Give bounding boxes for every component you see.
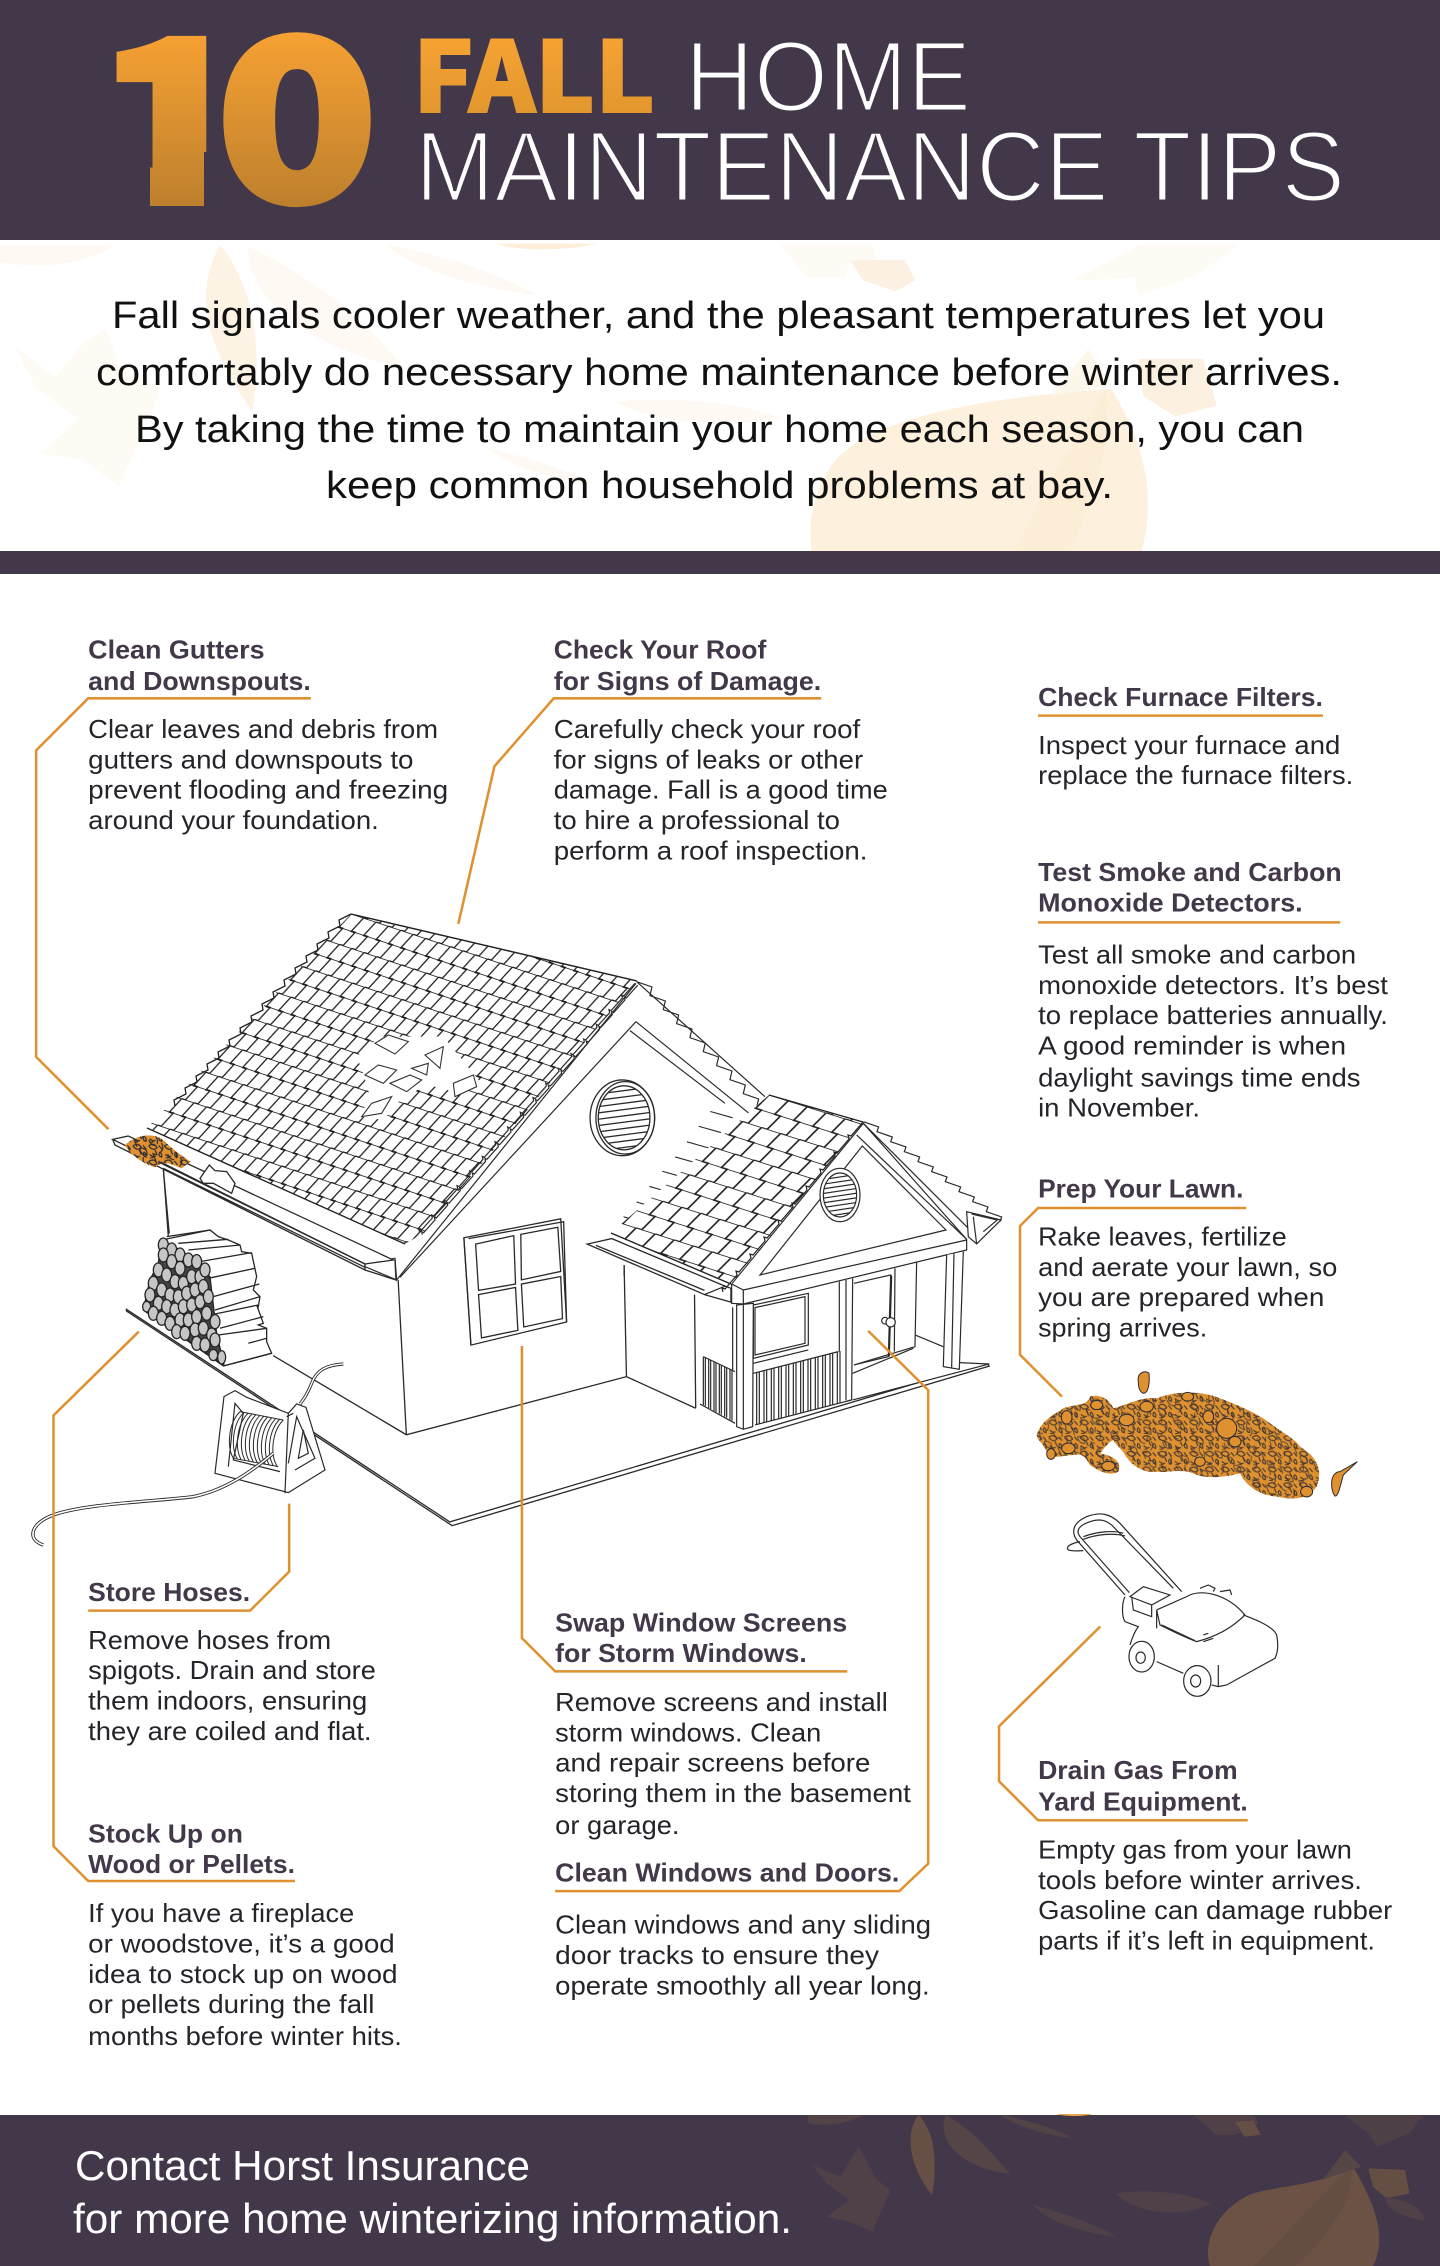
tip: clean gutters: gutters and downspouts to — [88, 746, 413, 774]
porch body — [700, 1250, 989, 1430]
tip: swap screens: storm windows. Clean — [555, 1719, 821, 1747]
background leaves: intro — [0, 244, 1240, 561]
tip: check roof: Carefully check your roof — [554, 716, 861, 744]
tip: swap screens: or garage. — [555, 1812, 680, 1840]
tip: store hoses: spigots. Drain and store — [88, 1657, 376, 1685]
tip: smoke detectors: in November. — [1038, 1095, 1200, 1123]
tip: check roof: damage. Fall is a good time — [554, 777, 888, 805]
tip: smoke detectors: A good reminder is when — [1038, 1033, 1346, 1061]
tips callouts — [36, 636, 1393, 2051]
roof damage — [357, 1035, 480, 1120]
tip: stock wood: months before winter hits. — [88, 2023, 402, 2051]
back wall — [854, 1262, 917, 1365]
tip: clean gutters: prevent flooding and freezing — [88, 777, 448, 805]
tip: check roof: to hire a professional to — [554, 807, 840, 835]
tip: stock wood: Stock Up on — [88, 1821, 243, 1849]
leaf pile illustration — [1037, 1372, 1357, 1499]
main gable, rake tiles — [365, 982, 765, 1280]
tip: smoke detectors — [1038, 859, 1388, 1123]
tip: swap screens: storing them in the basement — [555, 1780, 911, 1808]
tip: store hoses: Store Hoses. — [88, 1579, 250, 1607]
intro paragraph: keep common household problems at bay. — [326, 465, 1113, 507]
house illustration — [33, 914, 1002, 1545]
tip: store hoses — [88, 1504, 376, 1746]
tip: stock wood: Wood or Pellets. — [88, 1851, 295, 1879]
tip: clean gutters: Clean Gutters — [88, 636, 265, 664]
tip: drain gas: tools before winter arrives. — [1038, 1867, 1362, 1895]
tip: clean gutters — [36, 636, 448, 1129]
tip: check roof: Check Your Roof — [554, 636, 767, 664]
tip: prep lawn: and aerate your lawn, so — [1038, 1254, 1337, 1282]
tip: swap screens: and repair screens before — [555, 1750, 870, 1778]
ground slab and walls — [126, 1170, 989, 1526]
title word HOME: HOME — [685, 21, 971, 133]
intro paragraph — [96, 295, 1342, 507]
tip: check roof: for Signs of Damage. — [554, 668, 821, 696]
lawn mower illustration — [1067, 1514, 1278, 1696]
header banner — [0, 0, 1440, 269]
center column — [839, 1278, 853, 1402]
woodpile — [143, 1230, 272, 1366]
tip: swap screens: Swap Window Screens — [555, 1609, 847, 1637]
tip: stock wood — [53, 1332, 402, 2051]
tip: clean windows: operate smoothly all year long. — [555, 1972, 930, 2000]
title word FALL: FALL — [413, 0, 655, 140]
tip: furnace filters: Check Furnace Filters. — [1038, 684, 1323, 712]
tip: smoke detectors: Test Smoke and Carbon — [1038, 859, 1342, 887]
intro paragraph: By taking the time to maintain your home each season, you can — [135, 409, 1304, 451]
porch stub lines — [624, 1111, 733, 1223]
main roof tiles — [147, 914, 637, 1244]
left fence — [700, 1357, 735, 1423]
tip: furnace filters — [1038, 684, 1353, 790]
title number 10 — [94, 0, 378, 269]
title line MAINTENANCE TIPS: MAINTENANCE TIPS — [415, 111, 1345, 223]
tip: store hoses: they are coiled and flat. — [88, 1718, 372, 1746]
left post — [737, 1303, 753, 1429]
hose reel — [33, 1364, 343, 1545]
tip: swap screens: for Storm Windows. — [555, 1640, 807, 1668]
porch gutter — [587, 1239, 731, 1302]
intro paragraph: comfortably do necessary home maintenance before winter arrives. — [96, 352, 1342, 394]
divider band — [0, 551, 1440, 574]
tip: drain gas: Empty gas from your lawn — [1038, 1836, 1352, 1864]
tip: drain gas: Gasoline can damage rubber — [1038, 1897, 1393, 1925]
porch gutter end — [967, 1212, 1001, 1244]
tip: stock wood: If you have a fireplace — [88, 1900, 354, 1928]
window — [753, 1293, 808, 1363]
left gutter — [113, 1136, 396, 1280]
tip: clean gutters: around your foundation. — [88, 807, 379, 835]
tip: store hoses: Remove hoses from — [88, 1627, 331, 1655]
tip: clean windows: Clean Windows and Doors. — [555, 1860, 899, 1888]
tip: furnace filters: replace the furnace filters. — [1038, 762, 1353, 790]
tip: check roof — [458, 636, 888, 924]
tip: store hoses: them indoors, ensuring — [88, 1688, 367, 1716]
tip: prep lawn — [1020, 1176, 1337, 1397]
footer banner: for more home winterizing information. — [73, 2195, 792, 2242]
front window — [464, 1219, 567, 1345]
tip: drain gas: parts if it’s left in equipment. — [1038, 1928, 1375, 1956]
tip: stock wood: idea to stock up on wood — [88, 1961, 398, 1989]
tip: smoke detectors: monoxide detectors. It’s best — [1038, 972, 1388, 1000]
tip: stock wood: or pellets during the fall — [88, 1991, 374, 2019]
tip: clean gutters: Clear leaves and debris from — [88, 716, 438, 744]
tip: check roof: perform a roof inspection. — [554, 837, 867, 865]
footer text: Contact Horst Insurance — [75, 2142, 530, 2189]
tip: check roof: for signs of leaks or other — [554, 746, 864, 774]
tip: furnace filters: Inspect your furnace and — [1038, 732, 1340, 760]
door — [854, 1275, 892, 1365]
footer leaves — [808, 2114, 1424, 2266]
porch — [700, 1122, 1002, 1430]
tip: drain gas: Yard Equipment. — [1038, 1789, 1248, 1817]
tip: smoke detectors: to replace batteries annually. — [1038, 1002, 1388, 1030]
tip: drain gas: Drain Gas From — [1038, 1757, 1238, 1785]
porch roof tiles — [611, 1095, 863, 1292]
tip: smoke detectors: Test all smoke and carbon — [1038, 941, 1356, 969]
round attic vent — [590, 1080, 658, 1156]
tip: prep lawn: Rake leaves, fertilize — [1038, 1223, 1287, 1251]
right fence — [753, 1352, 852, 1425]
tip: prep lawn: you are prepared when — [1038, 1284, 1324, 1312]
tip: prep lawn: Prep Your Lawn. — [1038, 1176, 1243, 1204]
tip: drain gas — [999, 1627, 1393, 1956]
intro paragraph: Fall signals cooler weather, and the pleasant temperatures let you — [112, 295, 1325, 337]
tip: clean windows: Clean windows and any sliding — [555, 1912, 931, 1940]
tip: smoke detectors: daylight savings time ends — [1038, 1064, 1360, 1092]
tip: clean gutters: and Downspouts. — [88, 668, 311, 696]
tip: smoke detectors: Monoxide Detectors. — [1038, 889, 1303, 917]
porch vent — [820, 1168, 860, 1222]
right post — [943, 1252, 963, 1369]
leaves clogging gutter — [125, 1135, 191, 1168]
tip: clean windows — [555, 1331, 931, 2000]
tip: swap screens: Remove screens and install — [555, 1689, 888, 1717]
footer banner — [0, 2114, 1440, 2266]
tip: stock wood: or woodstove, it’s a good — [88, 1930, 395, 1958]
tip: swap screens — [522, 1346, 911, 1840]
porch gable — [732, 1123, 967, 1304]
tip: clean windows: door tracks to ensure they — [555, 1942, 879, 1970]
tip: prep lawn: spring arrives. — [1038, 1314, 1207, 1342]
